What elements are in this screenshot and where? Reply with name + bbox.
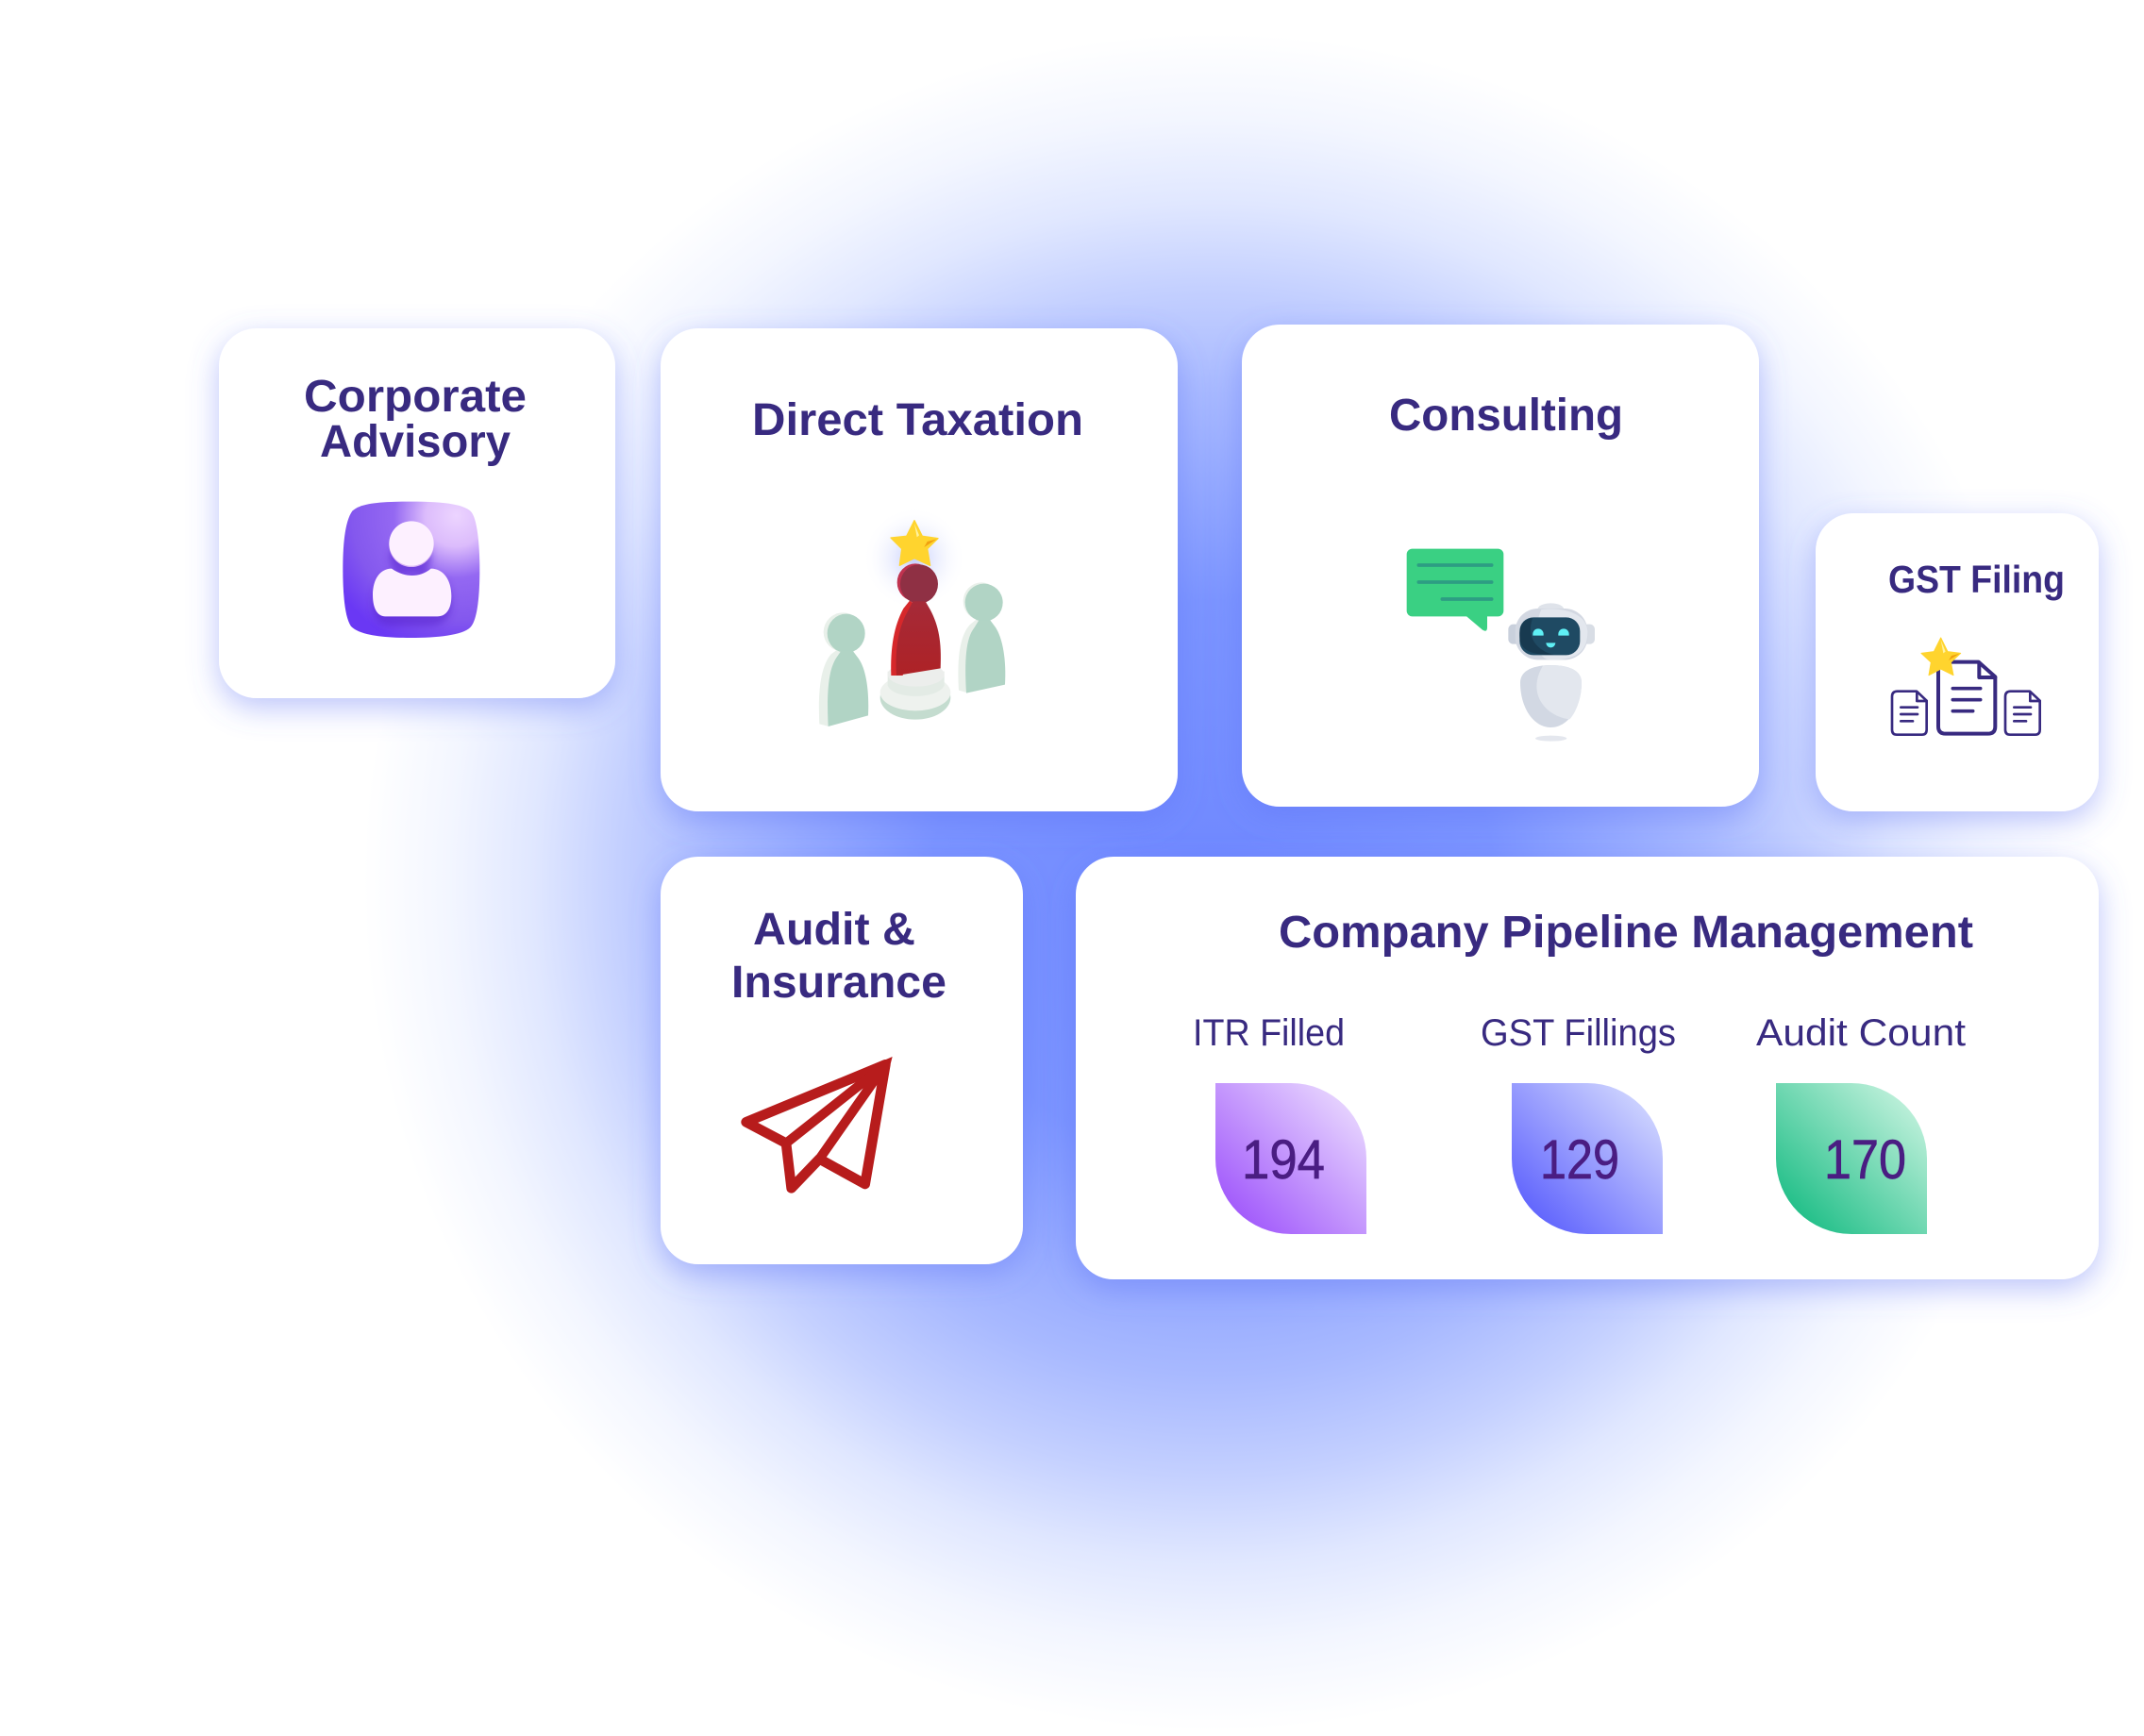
- stat: gst fillings: 129: [1540, 1129, 1619, 1191]
- stat: audit count: Audit Count: [1756, 1012, 1966, 1054]
- icon: chat robot: [1407, 549, 1595, 742]
- stat: itr filled: 194: [1242, 1129, 1325, 1191]
- panel: gst filing: [1816, 513, 2099, 811]
- heading: audit and insurance: [731, 905, 946, 1008]
- icon: person badge: [343, 502, 479, 638]
- icon: documents with star: [1892, 638, 2040, 735]
- heading: corporate advisory: [304, 372, 527, 467]
- panel: corporate advisory: [219, 328, 615, 698]
- stat: itr filled: ITR Filled: [1193, 1012, 1345, 1054]
- heading: consulting: Consulting: [1389, 391, 1623, 441]
- heading: corporate advisory: Corporate: [304, 372, 527, 422]
- icon: paper plane: [746, 1057, 893, 1188]
- robot: [1508, 603, 1595, 742]
- heading: audit and insurance: Insurance: [731, 958, 946, 1008]
- background glow: [363, 33, 2062, 1731]
- stat: gst fillings: GST Fillings: [1481, 1012, 1676, 1054]
- heading: company pipeline management: Company Pipeline Management: [1279, 908, 1973, 958]
- chat bubble: [1407, 549, 1503, 631]
- stat: audit count: 170: [1824, 1129, 1906, 1191]
- heading: direct taxation: Direct Taxation: [752, 395, 1083, 445]
- panel: company pipeline management: [1076, 857, 2099, 1279]
- stat: itr filled: [1193, 1012, 1366, 1234]
- stat: audit count: [1756, 1012, 1966, 1234]
- panel: direct taxation: [661, 328, 1178, 811]
- icon: pawns with star: [819, 507, 1005, 726]
- heading: audit and insurance: Audit &: [753, 905, 915, 955]
- stat: gst fillings: [1481, 1012, 1676, 1234]
- heading: corporate advisory: Advisory: [320, 417, 511, 467]
- panel: consulting: [1242, 325, 1759, 807]
- heading: gst filing: GST Filing: [1888, 558, 2065, 601]
- panel: audit and insurance: [661, 857, 1023, 1264]
